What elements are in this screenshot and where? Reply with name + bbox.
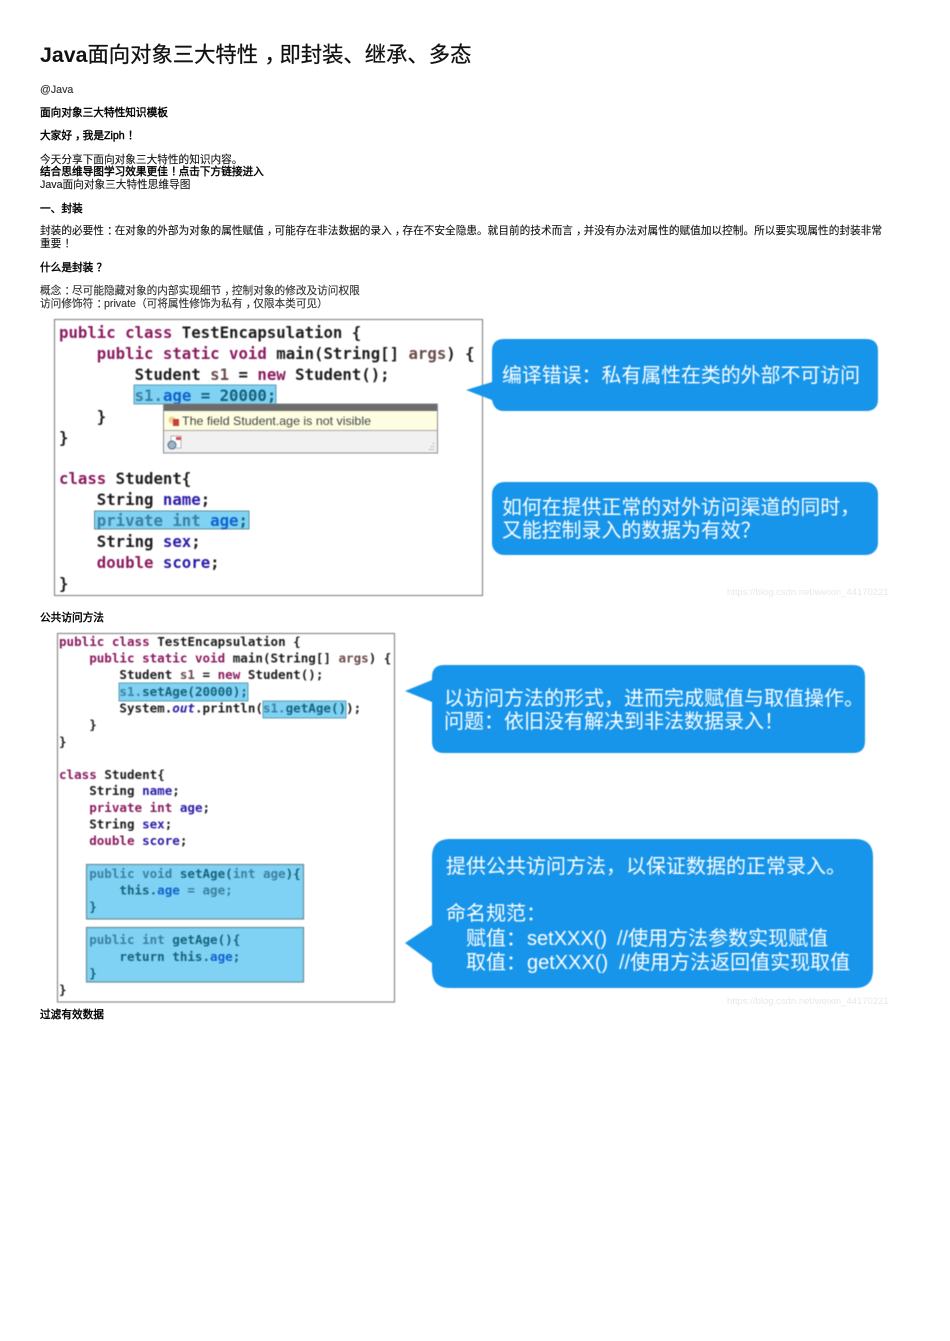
panel: public accessor code screenshot: class Student{ <box>59 767 165 782</box>
tooltip: compiler error popup <box>164 404 438 453</box>
text: template heading: 面向对象三大特性知识模板 <box>40 107 168 119</box>
panel: public accessor code screenshot: } <box>59 734 67 749</box>
heading: filter valid data: 过滤有效数据 <box>40 1009 104 1021</box>
panel: public accessor code screenshot: } <box>59 982 67 997</box>
panel: private field code screenshot: String sex; <box>97 532 201 551</box>
callout: question about validating data: 又能控制录入的数据为有效？ <box>502 519 761 542</box>
panel: public accessor code screenshot: Student s1 = new Student(); <box>119 667 323 682</box>
callout: naming convention: getXXX() <box>527 952 608 974</box>
panel: private field code screenshot <box>54 320 482 596</box>
highlight: getAge method <box>86 928 304 982</box>
panel: public accessor code screenshot: public class TestEncapsulation { <box>59 634 301 649</box>
callout: naming convention: 赋值： <box>466 928 526 950</box>
panel: private field code screenshot: public static void main(String[] args) { <box>97 344 475 363</box>
text block: concept and access modifier: 概念 ：尽可能隐藏对象的内部实现细节 ，控制对象的修改及访问权限 访问修饰符 ：private（可将属性修饰为私有 ，仅限本类可见） <box>40 285 360 310</box>
callout: compile error <box>466 339 878 411</box>
panel: private field code screenshot: public class TestEncapsulation { <box>59 323 361 342</box>
heading: public access methods: 公共访问方法 <box>40 612 104 624</box>
panel: private field code screenshot: class Student{ <box>59 469 191 488</box>
callout: question about validating data: 如何在提供正常的对外访问渠道的同时， <box>502 496 860 519</box>
panel: public accessor code screenshot: String sex; <box>89 816 172 832</box>
icon: error marker <box>168 416 179 426</box>
panel: private field code screenshot: double score; <box>97 553 220 572</box>
callout: naming convention: setXXX() <box>527 928 607 950</box>
callout: question about validating data <box>492 482 878 555</box>
callout: access method form: 以访问方法的形式，进而完成赋值与取值操作。 <box>444 687 864 710</box>
title: Java面向对象三大特性 ，即封装、继承、多态 <box>40 43 471 67</box>
text block: why encapsulation is necessary: 封装的必要性 ：在对象的外部为对象的属性赋值 ，可能存在非法数据的录入 ，存在不安全隐患。就目前的技术而言 ，并没有办法对属性的赋值加以控制。所以要实现属性的封装非常 重要 ！ <box>40 225 882 250</box>
panel: public accessor code screenshot: } <box>89 966 97 980</box>
callout: naming convention <box>405 839 873 988</box>
callout: naming convention: //使用方法返回值实现取值 <box>619 951 850 974</box>
panel: private field code screenshot: } <box>97 407 106 426</box>
panel: public accessor code screenshot: public int getAge(){ <box>89 932 240 947</box>
panel: public accessor code screenshot: } <box>89 899 97 914</box>
panel: public accessor code screenshot: String name; <box>89 783 180 798</box>
text block: introduction: 今天分享下面向对象三大特性的知识内容。 结合思维导图学习效果更佳 ！点击下方链接进入 Java面向对象三大特性思维导图 <box>40 154 264 190</box>
panel: public accessor code screenshot: public static void main(String[] args) { <box>89 650 391 666</box>
panel: private field code screenshot: Student s1 = new Student(); <box>135 365 390 384</box>
callout: naming convention: 命名规范： <box>446 902 546 925</box>
callout: naming convention: 提供公共访问方法，以保证数据的正常录入。 <box>446 855 846 878</box>
panel: public accessor code screenshot: } <box>89 717 97 732</box>
panel: private field code screenshot: String name; <box>97 490 210 509</box>
tooltip: compiler error popup: The field Student.age is not visible <box>182 414 371 428</box>
panel: private field code screenshot: s1.age = 20000; <box>135 386 276 405</box>
callout: compile error: 编译错误：私有属性在类的外部不可访问 <box>502 364 860 387</box>
callout: naming convention: 取值： <box>466 952 526 974</box>
panel: public accessor code screenshot <box>58 634 394 1002</box>
icon: quick fix document <box>168 436 181 449</box>
panel: public accessor code screenshot: s1.setAge(20000); <box>119 684 248 699</box>
panel: public accessor code screenshot: return this.age; <box>119 949 240 964</box>
watermark: first figure: https://blog.csdn.net/weixin_44170221 <box>727 587 889 598</box>
heading: encapsulation section: 一、封装 <box>40 203 83 215</box>
callout: naming convention: //使用方法参数实现赋值 <box>617 927 828 950</box>
callout: access method form <box>405 665 865 753</box>
panel: private field code screenshot: } <box>59 574 68 593</box>
panel: public accessor code screenshot: public void setAge(int age){ <box>89 866 301 881</box>
text: greeting: 大家好 ，我是Ziph ！ <box>40 130 139 142</box>
panel: public accessor code screenshot: this.age = age; <box>119 882 233 898</box>
panel: private field code screenshot: private int age; <box>97 511 248 530</box>
heading: what is encapsulation: 什么是封装 ？ <box>40 262 107 274</box>
highlight: setAge method <box>86 864 304 919</box>
tag: @Java: @Java <box>40 84 73 96</box>
callout: access method form: 问题：依旧没有解决到非法数据录入！ <box>444 710 784 733</box>
panel: private field code screenshot: } <box>59 428 68 447</box>
panel: public accessor code screenshot: System.out.println(s1.getAge()); <box>119 700 361 716</box>
panel: public accessor code screenshot: double score; <box>89 833 187 848</box>
watermark: second figure: https://blog.csdn.net/weixin_44170221 <box>727 996 889 1007</box>
panel: public accessor code screenshot: private int age; <box>89 800 210 815</box>
